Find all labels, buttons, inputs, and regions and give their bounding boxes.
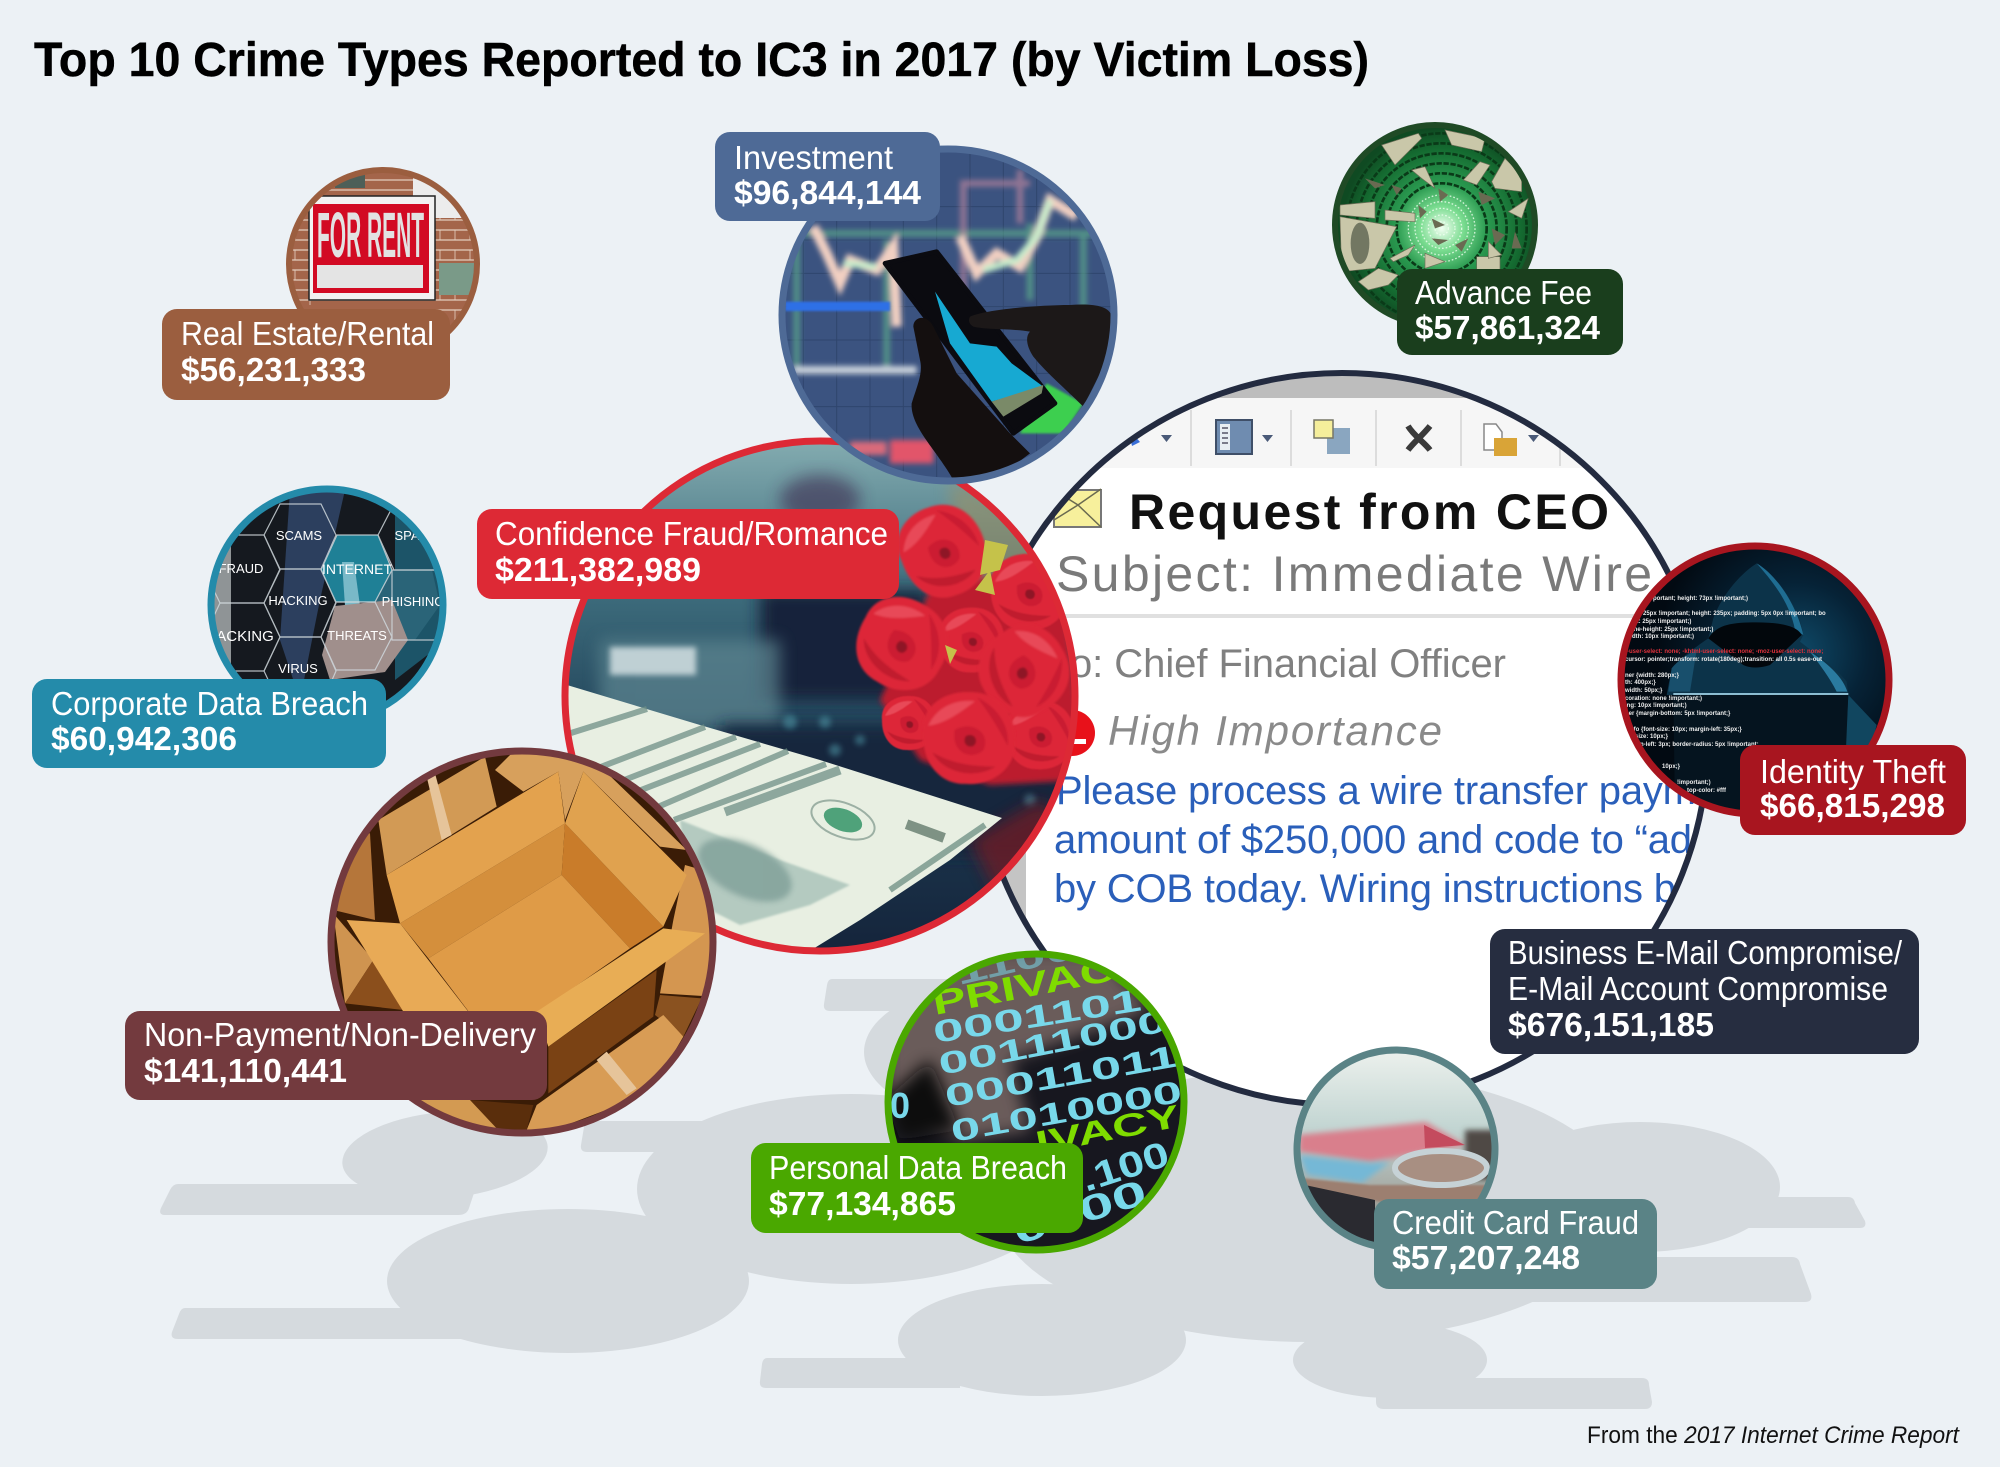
panel: business e-mail compromise [970, 365, 1919, 1115]
ground shadows [160, 978, 1865, 1409]
photo: binary digits and privacy text: 0000 [1008, 1171, 1152, 1253]
label: real estate / rental: Real Estate/Rental [181, 315, 434, 352]
label: confidence fraud / romance: $211,382,989 [495, 551, 701, 588]
label: real estate / rental [162, 309, 450, 400]
label: business e-mail compromise: Business E-Mail Compromise/ [1508, 934, 1903, 971]
photo: hooded hacker with code: th: 400px;} [1625, 680, 1656, 686]
label: identity theft: $66,815,298 [1760, 787, 1945, 824]
photo: hexagon network with hand: FRAUD [219, 561, 263, 576]
photo: email message: Request from CEO [1129, 484, 1609, 540]
label: non-payment / non-delivery: $141,110,441 [144, 1052, 347, 1089]
panel: investment [715, 132, 1130, 490]
label: corporate data breach: Corporate Data Breach [51, 685, 368, 722]
photo: binary digits and privacy text: .100 [1076, 1133, 1174, 1200]
label: corporate data breach [32, 679, 386, 768]
photo: hexagon network with hand: THREATS [327, 628, 387, 643]
label: confidence fraud / romance [477, 509, 899, 599]
photo: open cardboard box [334, 754, 710, 1130]
photo: hexagon network with hand: SPA [394, 528, 420, 543]
icon: high importance [1072, 710, 1095, 756]
photo: hexagon network with hand: SCAMS [276, 528, 322, 543]
panel: personal data breach [751, 929, 1185, 1255]
photo: hooded hacker with code: 10px;} [1662, 764, 1681, 770]
photo: hexagon network with hand: ACKING [216, 628, 274, 645]
photo: binary digits and privacy text [892, 958, 1180, 1246]
source credit: From the 2017 Internet Crime Report [1587, 1422, 1960, 1449]
label: real estate / rental: $56,231,333 [181, 351, 366, 388]
photo: hooded hacker with code: nfo {font-size: 10px; margin-left: 35px;} [1630, 727, 1742, 733]
photo: hooded hacker with code: -user-select: none; -khtml-user-select: none; -moz-user-select: none; [1627, 649, 1823, 655]
label: business e-mail compromise [1490, 929, 1919, 1054]
photo: hooded hacker with code: ner {margin-bottom: 5px !important;} [1625, 711, 1731, 717]
photo: hooded hacker with code: 25px !important; height: 235px; padding: 5px 0px !important; bo [1643, 611, 1826, 617]
photo: binary digits and privacy text: 0 [890, 1085, 910, 1126]
photo: email message: To: Chief Financial Officer [1050, 642, 1506, 686]
label: advance fee: $57,861,324 [1415, 309, 1601, 346]
photo: hexagon network with hand [214, 492, 440, 701]
photo: phone with stock chart [786, 152, 1110, 478]
photo: email message: High Importance [1108, 707, 1442, 754]
photo: binary digits and privacy text: 00111000 [936, 1003, 1170, 1082]
photo: hooded hacker with code: cursor: pointer;transform: rotate(180deg);transition: all 0.5s ease-out [1625, 657, 1822, 663]
infographic canvas: FOR RENT [317, 199, 424, 271]
photo: credit cards and keyboard [1300, 1054, 1492, 1242]
photo: hexagon network with hand: INTERNET [322, 561, 392, 577]
photo: hooded hacker with code: ine-height: 25px !important;) [1632, 627, 1713, 633]
photo: email message: Please process a wire transfer paym [1056, 769, 1696, 813]
label: identity theft: Identity Theft [1760, 753, 1946, 790]
label: non-payment / non-delivery [125, 1011, 547, 1100]
label: investment: $96,844,144 [734, 174, 922, 211]
photo: hooded hacker with code: portant; height: 73px !important;) [1653, 596, 1748, 602]
panel: real estate / rental [162, 167, 480, 400]
sign board [309, 196, 435, 300]
photo: hooded hacker with code: n-left: 3px; border-radius: 5px !important; [1640, 742, 1759, 748]
photo: hooded hacker with code [1624, 550, 1886, 810]
icon: envelope [1054, 489, 1101, 527]
label: credit card fraud: $57,207,248 [1392, 1239, 1580, 1276]
label: investment [715, 132, 940, 221]
label: corporate data breach: $60,942,306 [51, 720, 237, 757]
label: personal data breach [751, 1143, 1083, 1233]
photo: hooded hacker with code: width: 50px;} [1624, 688, 1663, 694]
photo: money tunnel [1338, 128, 1532, 314]
panel: corporate data breach [32, 485, 450, 768]
photo: hooded hacker with code: !important;) [1677, 780, 1711, 786]
photo: email message: amount of $250,000 and code to “ad [1054, 818, 1692, 862]
photo: hexagon network with hand: HACKING [268, 593, 328, 608]
photo: hooded hacker with code: size: 10px;} [1635, 734, 1669, 740]
photo: binary digits and privacy text: 01010000 [948, 1074, 1185, 1149]
label: advance fee: Advance Fee [1415, 274, 1592, 311]
photo: hooded hacker with code: nt: 25px !important;) [1633, 619, 1691, 625]
panel: identity theft [1615, 540, 1966, 835]
label: credit card fraud: Credit Card Fraud [1392, 1204, 1639, 1241]
title: Top 10 Crime Types Reported to IC3 in 2017 (by Victim Loss) [34, 34, 1369, 87]
photo: email message: by COB today. Wiring instructions b [1054, 867, 1676, 911]
panel: advance fee [1325, 115, 1623, 355]
label: credit card fraud [1374, 1199, 1657, 1289]
photo: hooded hacker with code: dth: 10px !important;) [1632, 634, 1694, 640]
photo: hooded hacker with code: coration: none !important;) [1625, 696, 1702, 702]
photo: binary digits and privacy text: 1100 [952, 929, 1079, 992]
panel: confidence fraud / romance [477, 435, 1100, 960]
label: business e-mail compromise: $676,151,185 [1508, 1006, 1714, 1043]
label: personal data breach: Personal Data Breach [769, 1149, 1067, 1186]
label: advance fee [1397, 269, 1623, 355]
photo: binary digits and privacy text: 00011011 [942, 1038, 1181, 1114]
photo: hooded hacker with code: top-color: #fff [1687, 788, 1727, 794]
label: investment: Investment [734, 139, 893, 176]
photo: hooded hacker with code: ner {width: 280px;} [1625, 673, 1680, 679]
photo: email message: Subject: Immediate Wire [1056, 546, 1652, 602]
photo: binary digits and privacy text: 0001101 [931, 982, 1144, 1050]
photo: binary digits and privacy text: IVACY [1032, 1098, 1183, 1161]
label: identity theft [1740, 745, 1966, 835]
photo: roses and dollar bills [568, 444, 1072, 948]
label: business e-mail compromise: E-Mail Account Compromise [1508, 970, 1888, 1007]
photo: hexagon network with hand: VIRUS [278, 661, 318, 676]
label: confidence fraud / romance: Confidence Fraud/Romance [495, 515, 888, 552]
photo: hooded hacker with code: ing: 10px !important;) [1625, 703, 1687, 709]
photo: binary digits and privacy text: PRIVAC [929, 950, 1119, 1023]
photo: email message [970, 365, 1710, 1115]
photo: for rent sign [292, 173, 474, 326]
panel: non-payment / non-delivery [125, 740, 730, 1140]
label: personal data breach: $77,134,865 [769, 1185, 956, 1222]
panel: credit card fraud [1294, 1047, 1657, 1289]
photo: hexagon network with hand: PHISHING [382, 594, 444, 609]
label: non-payment / non-delivery: Non-Payment/Non-Delivery [144, 1016, 536, 1053]
